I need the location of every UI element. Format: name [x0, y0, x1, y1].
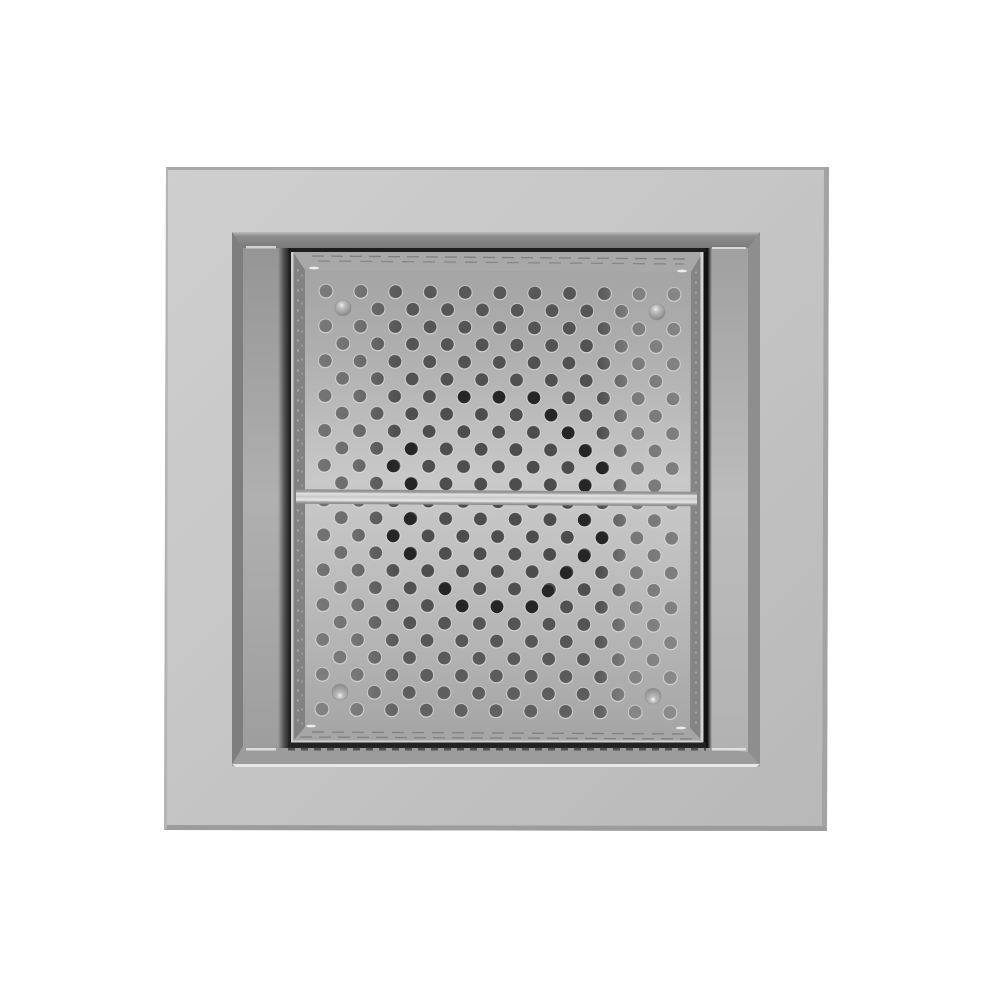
frame: outer flange: [164, 167, 829, 831]
basket shadow bottom: [288, 742, 706, 749]
recess bottom ledge: [232, 746, 760, 765]
basket shadow left: [278, 248, 291, 748]
corner dimples: [332, 300, 665, 704]
recess right wall: [748, 232, 760, 765]
product photo: recessed frame with perforated basket: [164, 167, 829, 831]
recess right floor: [704, 248, 748, 752]
perforation holes: [310, 276, 688, 722]
centre support bar: [296, 489, 697, 506]
basket shadow right: [703, 248, 712, 748]
recess left wall: [232, 232, 243, 764]
basket floor: [291, 252, 703, 742]
perforation hole fade: [310, 276, 688, 722]
basket: [278, 248, 712, 749]
basket top wall: [293, 252, 703, 272]
darker holes near the centre: [387, 391, 608, 613]
basket shadow top: [288, 248, 706, 252]
basket left wall: [291, 252, 305, 742]
frame: inner recess: [232, 232, 760, 767]
recess top wall: [232, 232, 760, 248]
basket bottom wall: [291, 725, 703, 742]
basket right wall: [690, 252, 704, 742]
perforations: [310, 276, 688, 722]
perforation rims: [310, 276, 688, 722]
recess left floor: [243, 248, 292, 746]
